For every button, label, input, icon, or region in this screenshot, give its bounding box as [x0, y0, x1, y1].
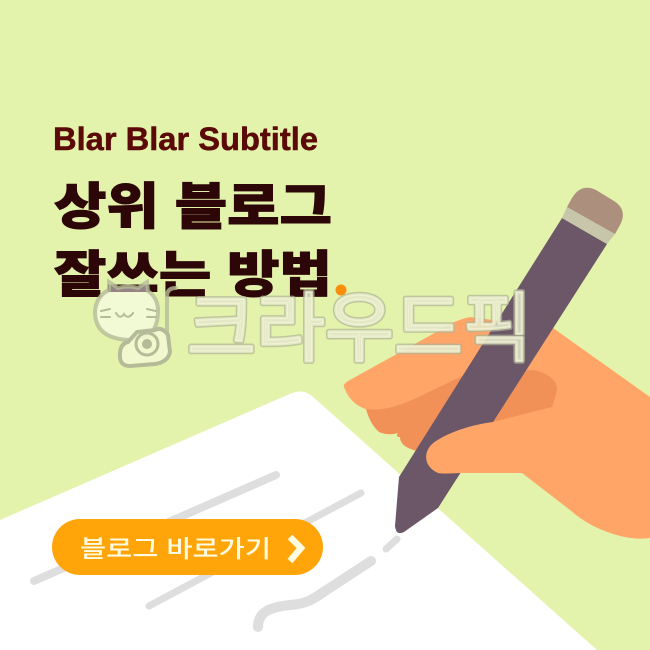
pen: [395, 188, 623, 533]
writing line 1: [34, 475, 276, 581]
watermark cat logo: [95, 282, 176, 366]
button: [52, 519, 323, 575]
watermark wordmark: 크라우드픽: [187, 287, 532, 372]
button label: 블로그 바로가기: [80, 536, 271, 563]
subtitle: Blar Blar Subtitle: [53, 121, 318, 157]
watermark camera: [120, 329, 170, 366]
writing squiggle: [258, 561, 371, 627]
watermark wordmark: 크라우드픽: [187, 287, 532, 372]
icon: chevron arrow: [290, 537, 301, 561]
thumb: [426, 407, 600, 480]
pen eraser: [567, 188, 623, 234]
title orange dot: [336, 284, 346, 296]
pen body: [395, 218, 607, 533]
writing line 2: [149, 493, 361, 606]
hand shadow: [366, 370, 557, 451]
title line 2: 잘쓰는 방법: [54, 247, 332, 303]
title line 1: 상위 블로그: [54, 179, 332, 235]
hand back: [344, 317, 650, 539]
writing dash: [386, 539, 397, 549]
watermark: [95, 282, 532, 372]
title: [54, 179, 332, 303]
paper sheet: [0, 392, 597, 650]
pen ferrule: [562, 207, 615, 244]
